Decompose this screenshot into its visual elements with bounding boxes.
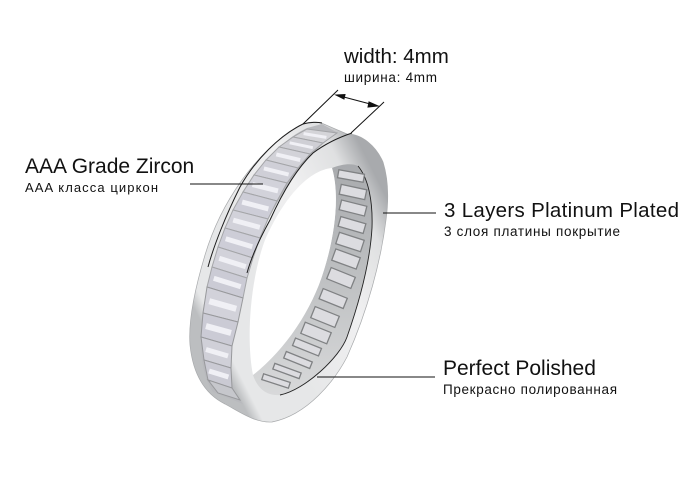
label: polished: Perfect Polished: [443, 357, 596, 380]
label: polished: [443, 357, 617, 397]
width dimension marker: [303, 90, 384, 133]
label: zircon: AAA Grade Zircon: [25, 155, 194, 178]
label: platinum: 3 слоя платины покрытие: [444, 224, 620, 239]
ring hole: [250, 168, 336, 375]
ring inner wall: [253, 164, 372, 395]
baguette stone band: [201, 124, 338, 404]
leader line: zircon: [190, 183, 263, 185]
inner wall edge shadow: [280, 166, 372, 395]
label: platinum: 3 Layers Platinum Plated: [444, 199, 679, 222]
label: polished: Прекрасно полированная: [443, 382, 617, 397]
label: zircon: [25, 155, 194, 195]
label: width: width: 4mm: [343, 45, 449, 68]
ring illustration: [190, 122, 388, 422]
rail dark edges: [208, 122, 352, 273]
label: width: [343, 45, 449, 85]
label: zircon: AAA класса циркон: [25, 180, 158, 195]
label: width: ширина: 4mm: [344, 70, 437, 85]
label: platinum: [444, 199, 679, 239]
ring outer body: [190, 122, 388, 422]
stone facet highlights: [202, 133, 330, 378]
leader line: polished: [317, 376, 435, 378]
leader line: platinum: [383, 212, 436, 214]
inner wall stone windows: [262, 170, 367, 388]
